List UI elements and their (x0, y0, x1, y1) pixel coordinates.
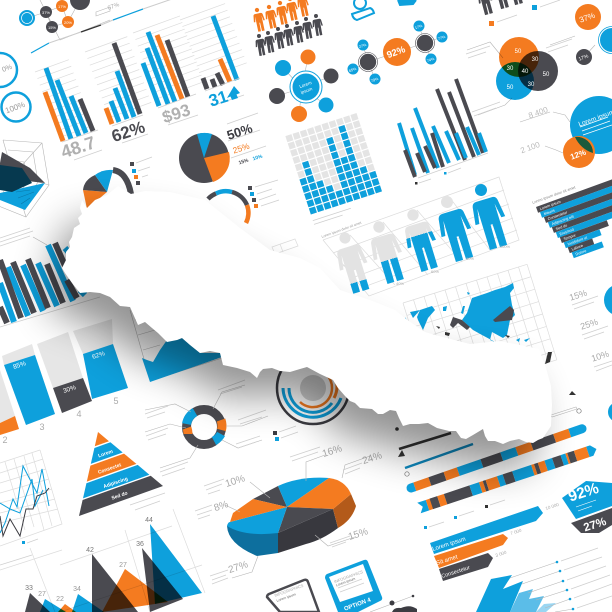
people chart: 40% (396, 281, 404, 286)
orange arrow: Sit amet (436, 554, 459, 567)
option 4 box: INFOGRAPHICS (333, 569, 364, 584)
triangle chart (0, 509, 205, 612)
triangle chart: 33 (25, 585, 33, 592)
percent rings (0, 53, 30, 122)
column 4: 30% (62, 384, 77, 395)
column 3 (2, 344, 55, 432)
venn diagram (466, 36, 575, 116)
bar chart: 31 up: 31 (206, 87, 230, 111)
badge 92% and 27%: 92% (566, 480, 601, 506)
bar chart: $93: $93 (160, 100, 193, 127)
horizontal bar list: Eiusmod (559, 228, 574, 236)
people icon: dark row (254, 13, 324, 56)
stripe bar one (405, 423, 588, 494)
column 4: 4 (76, 409, 82, 419)
arc gauge (208, 180, 279, 223)
arrow labels (430, 502, 560, 581)
column 5: 5 (113, 396, 119, 406)
right side percentages: 15% (568, 288, 588, 303)
percent circles top right: 17% (578, 53, 590, 63)
bar chart: 62%: 62% (109, 117, 147, 146)
pie sides (227, 494, 356, 556)
percent rings: 100% (4, 100, 26, 115)
bar chart: $93 (133, 16, 204, 127)
blue and dark bar chart (399, 79, 488, 184)
orange arrow: 7 000 (510, 528, 522, 536)
figure 1 (330, 228, 375, 296)
pyramid: Consectet (97, 462, 122, 476)
right side percentages: 10% (590, 349, 610, 364)
venn diagram: 30 (532, 57, 539, 63)
horizontal bar list: Labore (571, 244, 584, 252)
horizontal bar list: Dolore (575, 249, 587, 257)
blue arrow (430, 502, 560, 554)
people chart: 80% (466, 256, 474, 261)
bar chart: 48.7: 48.7 (58, 132, 98, 162)
dark arrow (439, 550, 507, 581)
triangle chart: 27 (38, 591, 46, 598)
right side percentages (568, 284, 612, 422)
dark arrow: 3 000 (495, 550, 507, 558)
lorem ipsum venn with 12%: 2 100 (519, 140, 542, 155)
pyramid: Lorem (97, 449, 114, 459)
timeline sliders (395, 391, 581, 476)
node cluster 92%: 77% (437, 35, 446, 41)
torn white map shape (62, 186, 552, 444)
3D pie chart: 24% (361, 450, 384, 467)
triangle chart: 42 (86, 547, 94, 554)
right side percentages: 25% (579, 317, 599, 332)
blue arrow: Lorem ipsum (432, 536, 467, 553)
node cluster 92%: 79% (370, 77, 379, 83)
dark arrow: Consectetur (441, 565, 471, 580)
3D pie chart: 8% (213, 499, 230, 514)
horizontal bar list: Mauris (543, 209, 555, 216)
top node diagram: 37% (42, 10, 50, 15)
bar chart: 62% (85, 37, 151, 146)
option 4 box (325, 560, 382, 612)
pyramid: Sed do (111, 491, 129, 502)
blue arrow: 10 000 (545, 502, 560, 511)
dotted list (510, 548, 612, 612)
lorem ipsum venn with 12%: 12% (569, 148, 587, 162)
legend squares under ribbon (424, 500, 505, 529)
node cluster 92%: 92% (385, 44, 407, 61)
column 5: 62% (91, 350, 106, 361)
venn diagram: 30 (507, 66, 514, 72)
figure 2 (363, 217, 410, 286)
people icon: orange row (251, 0, 311, 32)
top node diagram (19, 0, 121, 40)
people icon: top dark figures (475, 0, 560, 26)
node cluster 92% (348, 20, 448, 84)
top node diagram: 17% (58, 4, 66, 9)
column 4 (37, 332, 92, 419)
big column chart (0, 319, 128, 445)
radar chart (0, 140, 49, 217)
horizontal bar list (532, 171, 612, 265)
percent circles top right (575, 4, 612, 65)
figure 5 (464, 180, 513, 252)
percent rings: 0% (1, 64, 13, 74)
3D pie chart (195, 443, 384, 584)
figure 4 (430, 192, 479, 264)
3D pie chart: 16% (321, 443, 344, 460)
bottom connected dots (370, 595, 417, 612)
triangle chart: 22 (56, 596, 64, 603)
venn diagram: 50 (515, 49, 522, 55)
people chart: 60% (431, 269, 439, 274)
venn diagram: 30 (528, 82, 535, 88)
column 2: 2 (2, 435, 8, 445)
horizontal bar list: Lorem ipsum dolor sit amet (532, 185, 577, 205)
option dark box (267, 580, 319, 612)
3D pie chart: 15% (347, 526, 370, 543)
stripe bar two ribbon (417, 444, 598, 513)
world map (403, 264, 557, 398)
cluster diagram: central node: ipsum (300, 86, 313, 95)
option dark box: INFOGRAPHICS (274, 583, 304, 598)
bar chart: 31 up (180, 4, 247, 111)
horizontal bar list: Sed do (555, 223, 568, 231)
column 3: 3 (39, 422, 45, 432)
torn map shadow (47, 217, 535, 470)
venn diagram: 50 (543, 72, 550, 78)
node cluster 92%: 65% (348, 67, 357, 73)
badge 92% and 27%: 27% (582, 516, 608, 534)
pyramid: Adipiscing (103, 476, 129, 490)
pie top (227, 478, 351, 534)
horizontal bar list: Tempor (563, 233, 577, 241)
triangle chart: 34 (73, 586, 81, 593)
triangle chart: 44 (145, 517, 153, 524)
node cluster 92%: 17% (414, 24, 423, 30)
small table behind map (272, 239, 298, 254)
triangle chart: 27 (119, 562, 127, 569)
node cluster 92%: 27% (358, 43, 367, 49)
pie chart 50%: 10% (252, 153, 264, 162)
badge 92% and 27% (562, 480, 612, 534)
horizontal bar list: Adipiscing elit (551, 214, 575, 226)
pie chart 50%: 15% (238, 157, 250, 166)
percent circles top right: 37% (578, 11, 596, 25)
horizontal bar list: Consectetur (547, 210, 569, 221)
lorem ipsum venn with 12%: 8 400 (527, 105, 550, 120)
bar chart: 48.7 (35, 60, 102, 162)
horizontal bar list: Incididunt ut (567, 235, 589, 246)
top node diagram: 15% (48, 25, 56, 30)
donut chart (145, 380, 268, 476)
bottom blue arrow stack (476, 575, 556, 612)
horizontal bar list: Lorem ipsum (539, 200, 561, 211)
pyramid (79, 432, 165, 516)
partially hidden pie and ring (83, 157, 152, 209)
3D pie chart: 10% (224, 473, 247, 490)
line chart (0, 450, 62, 546)
figure 3 (397, 205, 444, 274)
left bar chart: dark and blue bars (0, 228, 100, 327)
option 4 box: Lorem ipsum (335, 577, 356, 587)
concentric target chart (273, 352, 349, 441)
top node diagram: 20% (64, 20, 72, 25)
waffle chart (285, 113, 382, 224)
column 5 (73, 319, 128, 406)
node cluster 92%: 74% (426, 57, 435, 63)
timeline bar (31, 0, 175, 53)
venn diagram: 50 (507, 85, 514, 91)
top node diagram: 67% (107, 2, 121, 12)
people chart (321, 177, 519, 296)
cluster diagram: central node (269, 50, 338, 122)
venn diagram: 40 (522, 69, 529, 75)
option dark box: Lorem ipsum (276, 592, 296, 603)
pie chart 50%: 25% (231, 141, 251, 156)
3D pie chart: 27% (227, 559, 250, 576)
pie chart 50% (179, 113, 266, 183)
lorem ipsum venn with 12% (519, 96, 612, 168)
icon: blue user at desk (352, 0, 416, 20)
area chart (130, 310, 222, 382)
people chart: 100% (500, 244, 511, 249)
option boxes (267, 560, 382, 612)
orange arrow (434, 528, 522, 568)
cluster diagram: central node: Lorem (299, 80, 313, 89)
column 3: 85% (12, 360, 27, 371)
pie chart 50%: 50% (225, 120, 255, 143)
people chart: Lorem ipsum dolor sit amet (321, 221, 362, 239)
triangle chart: 36 (136, 541, 144, 548)
